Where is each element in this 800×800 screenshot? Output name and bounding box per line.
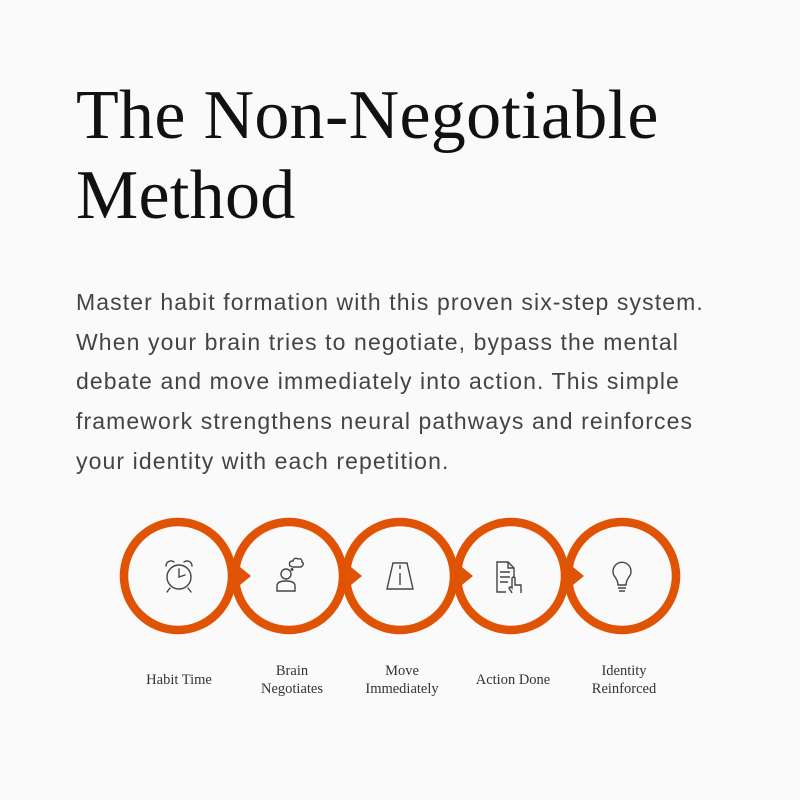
label: Habit Time: Habit Time <box>146 672 212 688</box>
label: Brain Negotiates: Brain <box>276 663 308 679</box>
intro paragraph: your identity with each repetition. <box>76 448 449 474</box>
icon: alarm clock <box>166 561 192 592</box>
label: Identity Reinforced <box>592 663 656 697</box>
icon: road <box>387 563 413 589</box>
label: Brain Negotiates <box>261 663 323 697</box>
title: The Non-Negotiable <box>76 77 659 154</box>
label: Move Immediately: Move <box>385 663 419 679</box>
intro paragraph: Master habit formation with this proven six-step system. <box>76 289 704 315</box>
label: Identity Reinforced: Identity <box>601 663 647 679</box>
label: Action Done: Action Done <box>476 672 550 688</box>
icon: person thinking <box>277 558 303 591</box>
label: Identity Reinforced: Reinforced <box>592 681 656 697</box>
arrows <box>229 558 584 594</box>
label: Move Immediately <box>365 663 439 697</box>
title: Method <box>76 157 296 234</box>
label: Brain Negotiates: Negotiates <box>261 681 323 697</box>
intro paragraph <box>76 289 704 474</box>
intro paragraph: debate and move immediately into action. This simple <box>76 368 680 394</box>
icon: light bulb <box>613 562 631 591</box>
intro paragraph: When your brain tries to negotiate, bypass the mental <box>76 329 679 355</box>
icon: document with hand <box>497 562 521 593</box>
intro paragraph: framework strengthens neural pathways and reinforces <box>76 408 693 434</box>
label: Move Immediately: Immediately <box>365 681 439 697</box>
title <box>76 77 659 234</box>
